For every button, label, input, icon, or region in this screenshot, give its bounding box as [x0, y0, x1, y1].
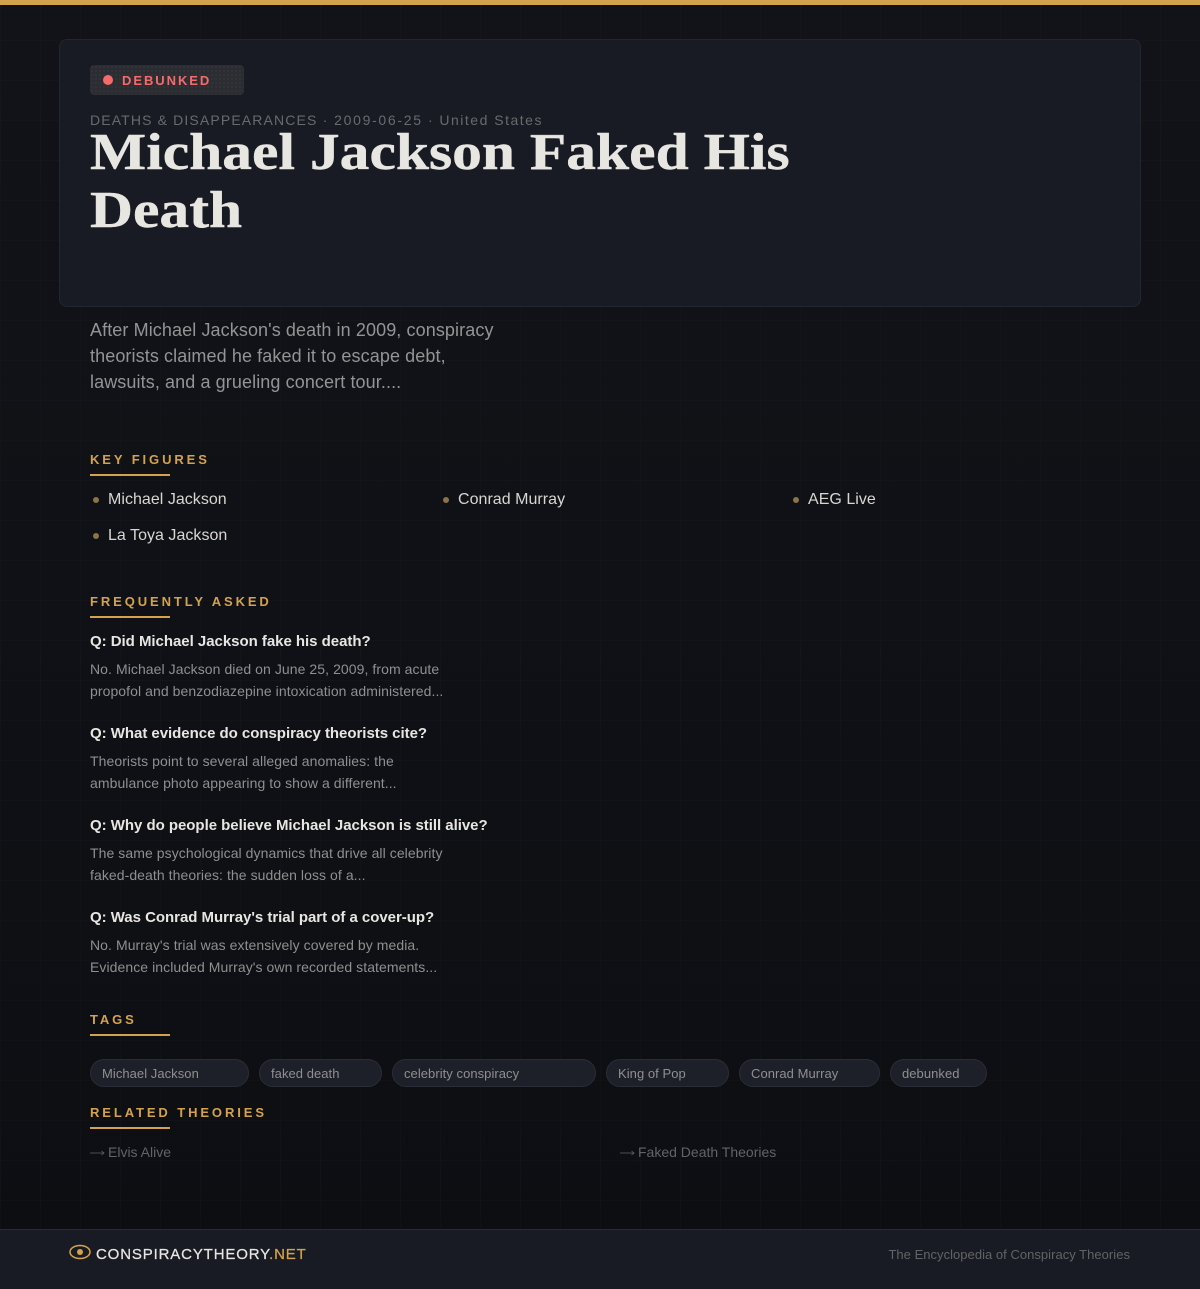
summary text: After Michael Jackson's death in 2009, conspiracy	[90, 320, 494, 340]
answer 4: Evidence included Murray's own recorded statements...	[90, 959, 437, 975]
title: Death	[90, 182, 242, 239]
summary text: lawsuits, and a grueling concert tour....	[90, 372, 401, 392]
badge label: DEBUNKED	[122, 73, 211, 88]
key figure: Michael Jackson: Michael Jackson	[108, 491, 227, 508]
tag: Michael Jackson	[90, 1059, 249, 1087]
related link: Faked Death Theories: Faked Death Theories	[638, 1144, 776, 1160]
answer 2: ambulance photo appearing to show a different...	[90, 775, 397, 791]
tag: King of Pop	[606, 1059, 729, 1087]
title	[90, 124, 790, 239]
tag: King of Pop: King of Pop	[618, 1066, 686, 1081]
question 3: Q: Why do people believe Michael Jackson is still alive?	[90, 817, 488, 834]
answer 1	[90, 661, 443, 699]
tag: faked death: faked death	[271, 1066, 340, 1081]
category and date line: DEATHS & DISAPPEARANCES · 2009-06-25 · United States	[90, 112, 543, 128]
icon: eye logo	[69, 1244, 91, 1260]
key figure: Conrad Murray: Conrad Murray	[458, 491, 565, 508]
answer 2: Theorists point to several alleged anomalies: the	[90, 753, 394, 769]
tag: debunked	[890, 1059, 987, 1087]
tag: Conrad Murray	[739, 1059, 880, 1087]
question 2: Q: What evidence do conspiracy theorists cite?	[90, 725, 427, 742]
answer 3: faked-death theories: the sudden loss of a...	[90, 867, 366, 883]
heading: related theories: RELATED THEORIES	[90, 1105, 267, 1120]
summary text	[90, 320, 494, 392]
panel: hero header	[59, 39, 1141, 307]
tag: celebrity conspiracy: celebrity conspiracy	[404, 1066, 519, 1081]
answer 4	[90, 937, 437, 975]
footer tagline: The Encyclopedia of Conspiracy Theories	[888, 1247, 1130, 1262]
heading: key figures: KEY FIGURES	[90, 452, 210, 467]
answer 4: No. Murray's trial was extensively covered by media.	[90, 937, 419, 953]
footer logo wordmark: CONSPIRACYTHEORY.NET	[96, 1246, 307, 1263]
key figure: AEG Live: AEG Live	[808, 491, 876, 508]
tag: Conrad Murray: Conrad Murray	[751, 1066, 838, 1081]
tag: Michael Jackson: Michael Jackson	[102, 1066, 199, 1081]
title: Michael Jackson Faked His	[90, 124, 790, 181]
question 4: Q: Was Conrad Murray's trial part of a cover-up?	[90, 909, 434, 926]
key figure: La Toya Jackson: La Toya Jackson	[108, 527, 227, 544]
related link: Elvis Alive: Elvis Alive	[108, 1144, 171, 1160]
answer 2	[90, 753, 397, 791]
answer 1: propofol and benzodiazepine intoxication administered...	[90, 683, 443, 699]
answer 3	[90, 845, 443, 883]
tag: faked death	[259, 1059, 382, 1087]
top accent bar	[0, 0, 1200, 5]
summary text: theorists claimed he faked it to escape debt,	[90, 346, 446, 366]
heading: frequently asked: FREQUENTLY ASKED	[90, 594, 272, 609]
tag: celebrity conspiracy	[392, 1059, 596, 1087]
answer 3: The same psychological dynamics that drive all celebrity	[90, 845, 443, 861]
status badge: debunked	[90, 65, 244, 95]
question 1: Q: Did Michael Jackson fake his death?	[90, 633, 371, 650]
heading: tags: TAGS	[90, 1012, 137, 1027]
footer bar	[0, 1229, 1200, 1289]
tag: debunked: debunked	[902, 1066, 960, 1081]
answer 1: No. Michael Jackson died on June 25, 2009, from acute	[90, 661, 439, 677]
badge dot	[103, 75, 113, 85]
